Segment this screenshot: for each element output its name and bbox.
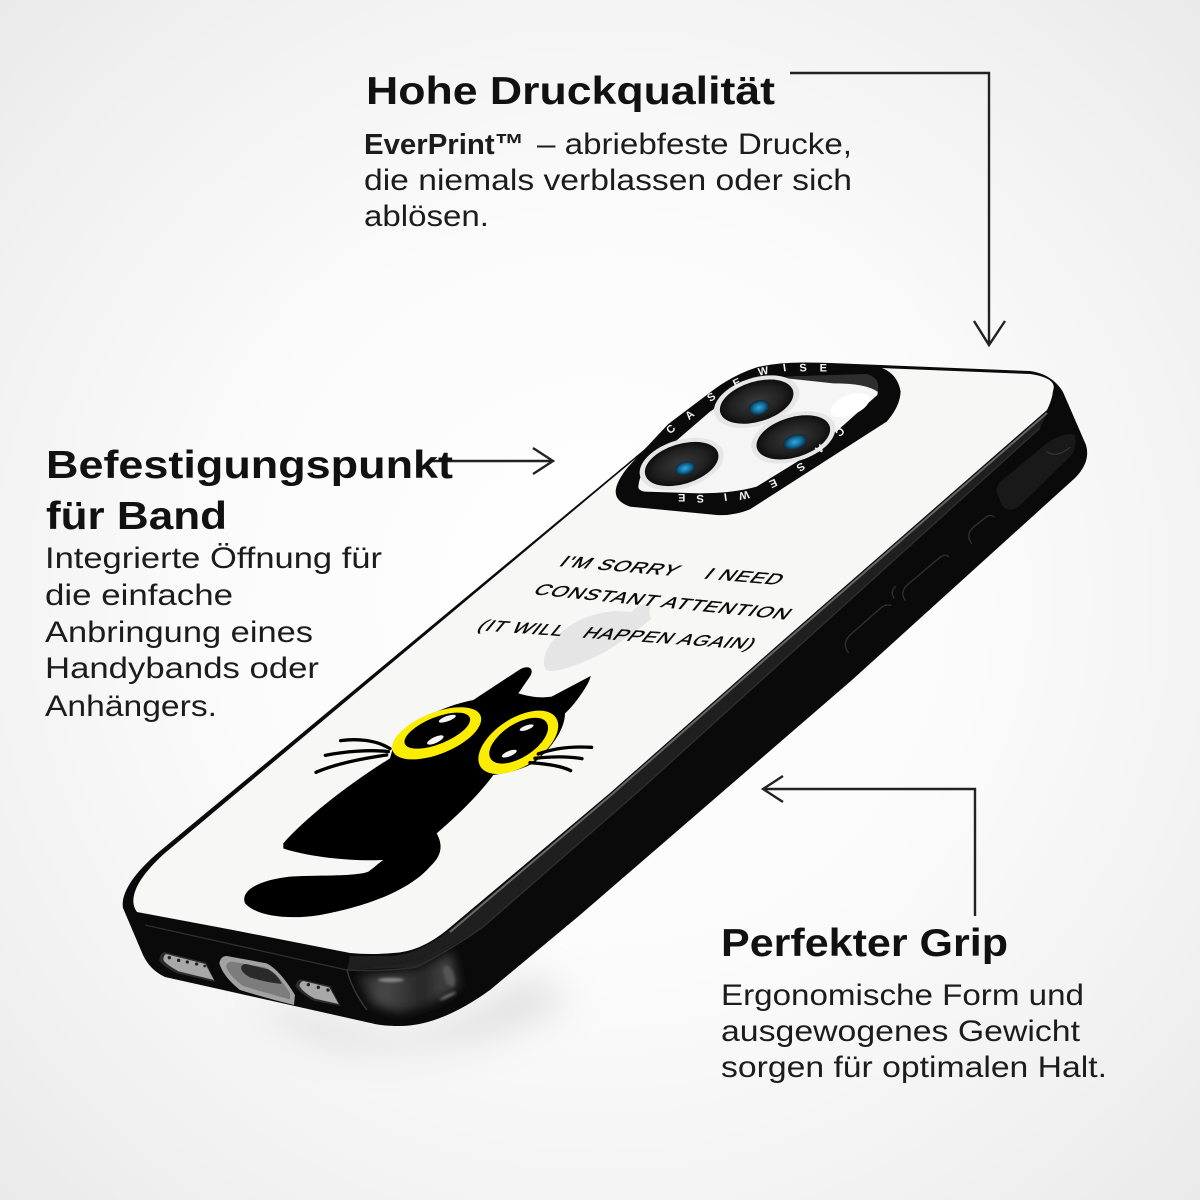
casewise lettering: E xyxy=(731,376,743,390)
heading: lanyard point: Befestigungspunkt xyxy=(46,444,453,487)
description: print quality: EverPrint™ xyxy=(364,129,524,161)
shine highlights xyxy=(378,964,457,1001)
heading: lanyard point xyxy=(46,444,453,538)
casewise lettering: C xyxy=(832,424,846,439)
description: grip xyxy=(721,979,1107,1084)
description: lanyard point: die einfache xyxy=(45,579,233,612)
description: print quality xyxy=(364,128,852,233)
arrow: grip xyxy=(763,776,975,916)
apple logo xyxy=(544,604,652,671)
casewise lettering: A xyxy=(683,408,697,423)
casewise lettering: S xyxy=(696,492,704,504)
heading: grip: Perfekter Grip xyxy=(721,922,1008,965)
lens left xyxy=(633,428,730,500)
slogan line 3: (IT WILL HAPPEN AGAIN) xyxy=(473,618,761,653)
switch recess xyxy=(996,434,1076,510)
lens right xyxy=(745,402,842,473)
text block: grip xyxy=(721,922,1107,1084)
description: lanyard point xyxy=(45,542,382,723)
text block: print quality xyxy=(364,70,852,233)
corner band shade xyxy=(347,413,1047,970)
flash xyxy=(827,388,873,422)
casewise lettering xyxy=(664,362,846,504)
charging port xyxy=(219,956,295,1005)
bumper seam xyxy=(347,970,367,1010)
right eye xyxy=(467,698,569,787)
description: print quality: – abriebfeste Drucke, xyxy=(537,128,852,161)
description: grip: sorgen für optimalen Halt. xyxy=(721,1051,1107,1084)
description: lanyard point: Integrierte Öffnung für xyxy=(45,542,382,575)
inner frame shade xyxy=(767,374,878,392)
slogan line 2: CONSTANT ATTENTION xyxy=(529,582,797,623)
cat body and tail xyxy=(244,667,591,917)
phone shadow xyxy=(250,975,570,1050)
side buttons xyxy=(845,434,1076,653)
casewise lettering: S xyxy=(794,459,807,473)
description: lanyard point: Anhängers. xyxy=(45,690,217,723)
volume button lower xyxy=(845,605,891,653)
glossy edge highlight xyxy=(450,413,1047,932)
back face xyxy=(133,366,1054,954)
left speaker xyxy=(159,952,215,982)
text block: lanyard point xyxy=(45,444,453,723)
casewise lettering: W xyxy=(757,365,770,379)
casewise lettering: S xyxy=(705,391,718,405)
corner highlight xyxy=(1047,447,1070,454)
casewise lettering: W xyxy=(737,488,750,502)
left eye xyxy=(385,696,488,770)
right speaker xyxy=(295,979,341,1006)
description: lanyard point: Handybands oder xyxy=(45,652,319,685)
casewise lettering: E xyxy=(820,362,827,374)
casewise lettering: S xyxy=(799,362,807,375)
bottom ports xyxy=(159,952,341,1006)
description: lanyard point: Anbringung eines xyxy=(45,616,313,649)
casewise lettering: A xyxy=(812,441,826,455)
description: grip: ausgewogenes Gewicht xyxy=(721,1015,1081,1048)
slogan line 1: I'M SORRY I NEED xyxy=(555,554,789,589)
island window xyxy=(638,377,878,493)
heading: lanyard point: für Band xyxy=(46,495,227,538)
volume button upper xyxy=(892,555,949,600)
side ridge line xyxy=(145,428,1040,971)
case body xyxy=(123,363,1087,1026)
arrow: lanyard point xyxy=(430,448,553,474)
casewise lettering: C xyxy=(664,422,678,437)
power button xyxy=(969,515,994,543)
casewise lettering: E xyxy=(767,476,779,490)
camera island xyxy=(616,362,901,515)
arrow: print quality xyxy=(790,73,1005,345)
casewise lettering: E xyxy=(678,491,685,503)
casewise lettering: I xyxy=(782,362,787,375)
lens top xyxy=(708,366,806,437)
description: print quality: ablösen. xyxy=(364,200,489,233)
handwritten slogan xyxy=(473,554,797,653)
cat illustration xyxy=(244,667,592,917)
heading: print quality: Hohe Druckqualität xyxy=(366,70,775,113)
casewise lettering: I xyxy=(723,490,728,502)
description: grip: Ergonomische Form und xyxy=(721,979,1084,1012)
side shine xyxy=(356,952,460,1012)
whiskers xyxy=(316,740,592,772)
phone case xyxy=(123,362,1087,1026)
description: print quality: die niemals verblassen oder sich xyxy=(364,164,852,197)
island frame xyxy=(616,363,901,515)
